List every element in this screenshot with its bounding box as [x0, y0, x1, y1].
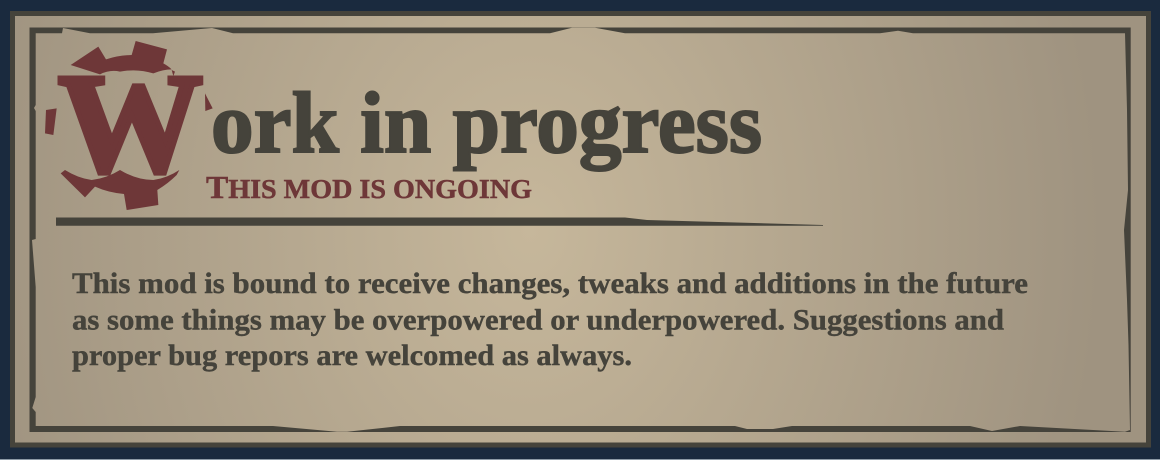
body text: as some things may be overpowered or underpowered. Suggestions and [72, 304, 1004, 336]
title remainder: ork in progress [211, 74, 762, 171]
body text [72, 267, 1028, 372]
title initial letter: W [58, 44, 203, 202]
divider [56, 218, 823, 226]
body text: This mod is bound to receive changes, tweaks and additions in the future [72, 267, 1028, 300]
body text: proper bug repors are welcomed as always. [72, 339, 632, 372]
title [58, 44, 762, 202]
subtitle: THIS MOD IS ONGOING [206, 169, 532, 205]
icon: gear emblem [45, 41, 213, 210]
